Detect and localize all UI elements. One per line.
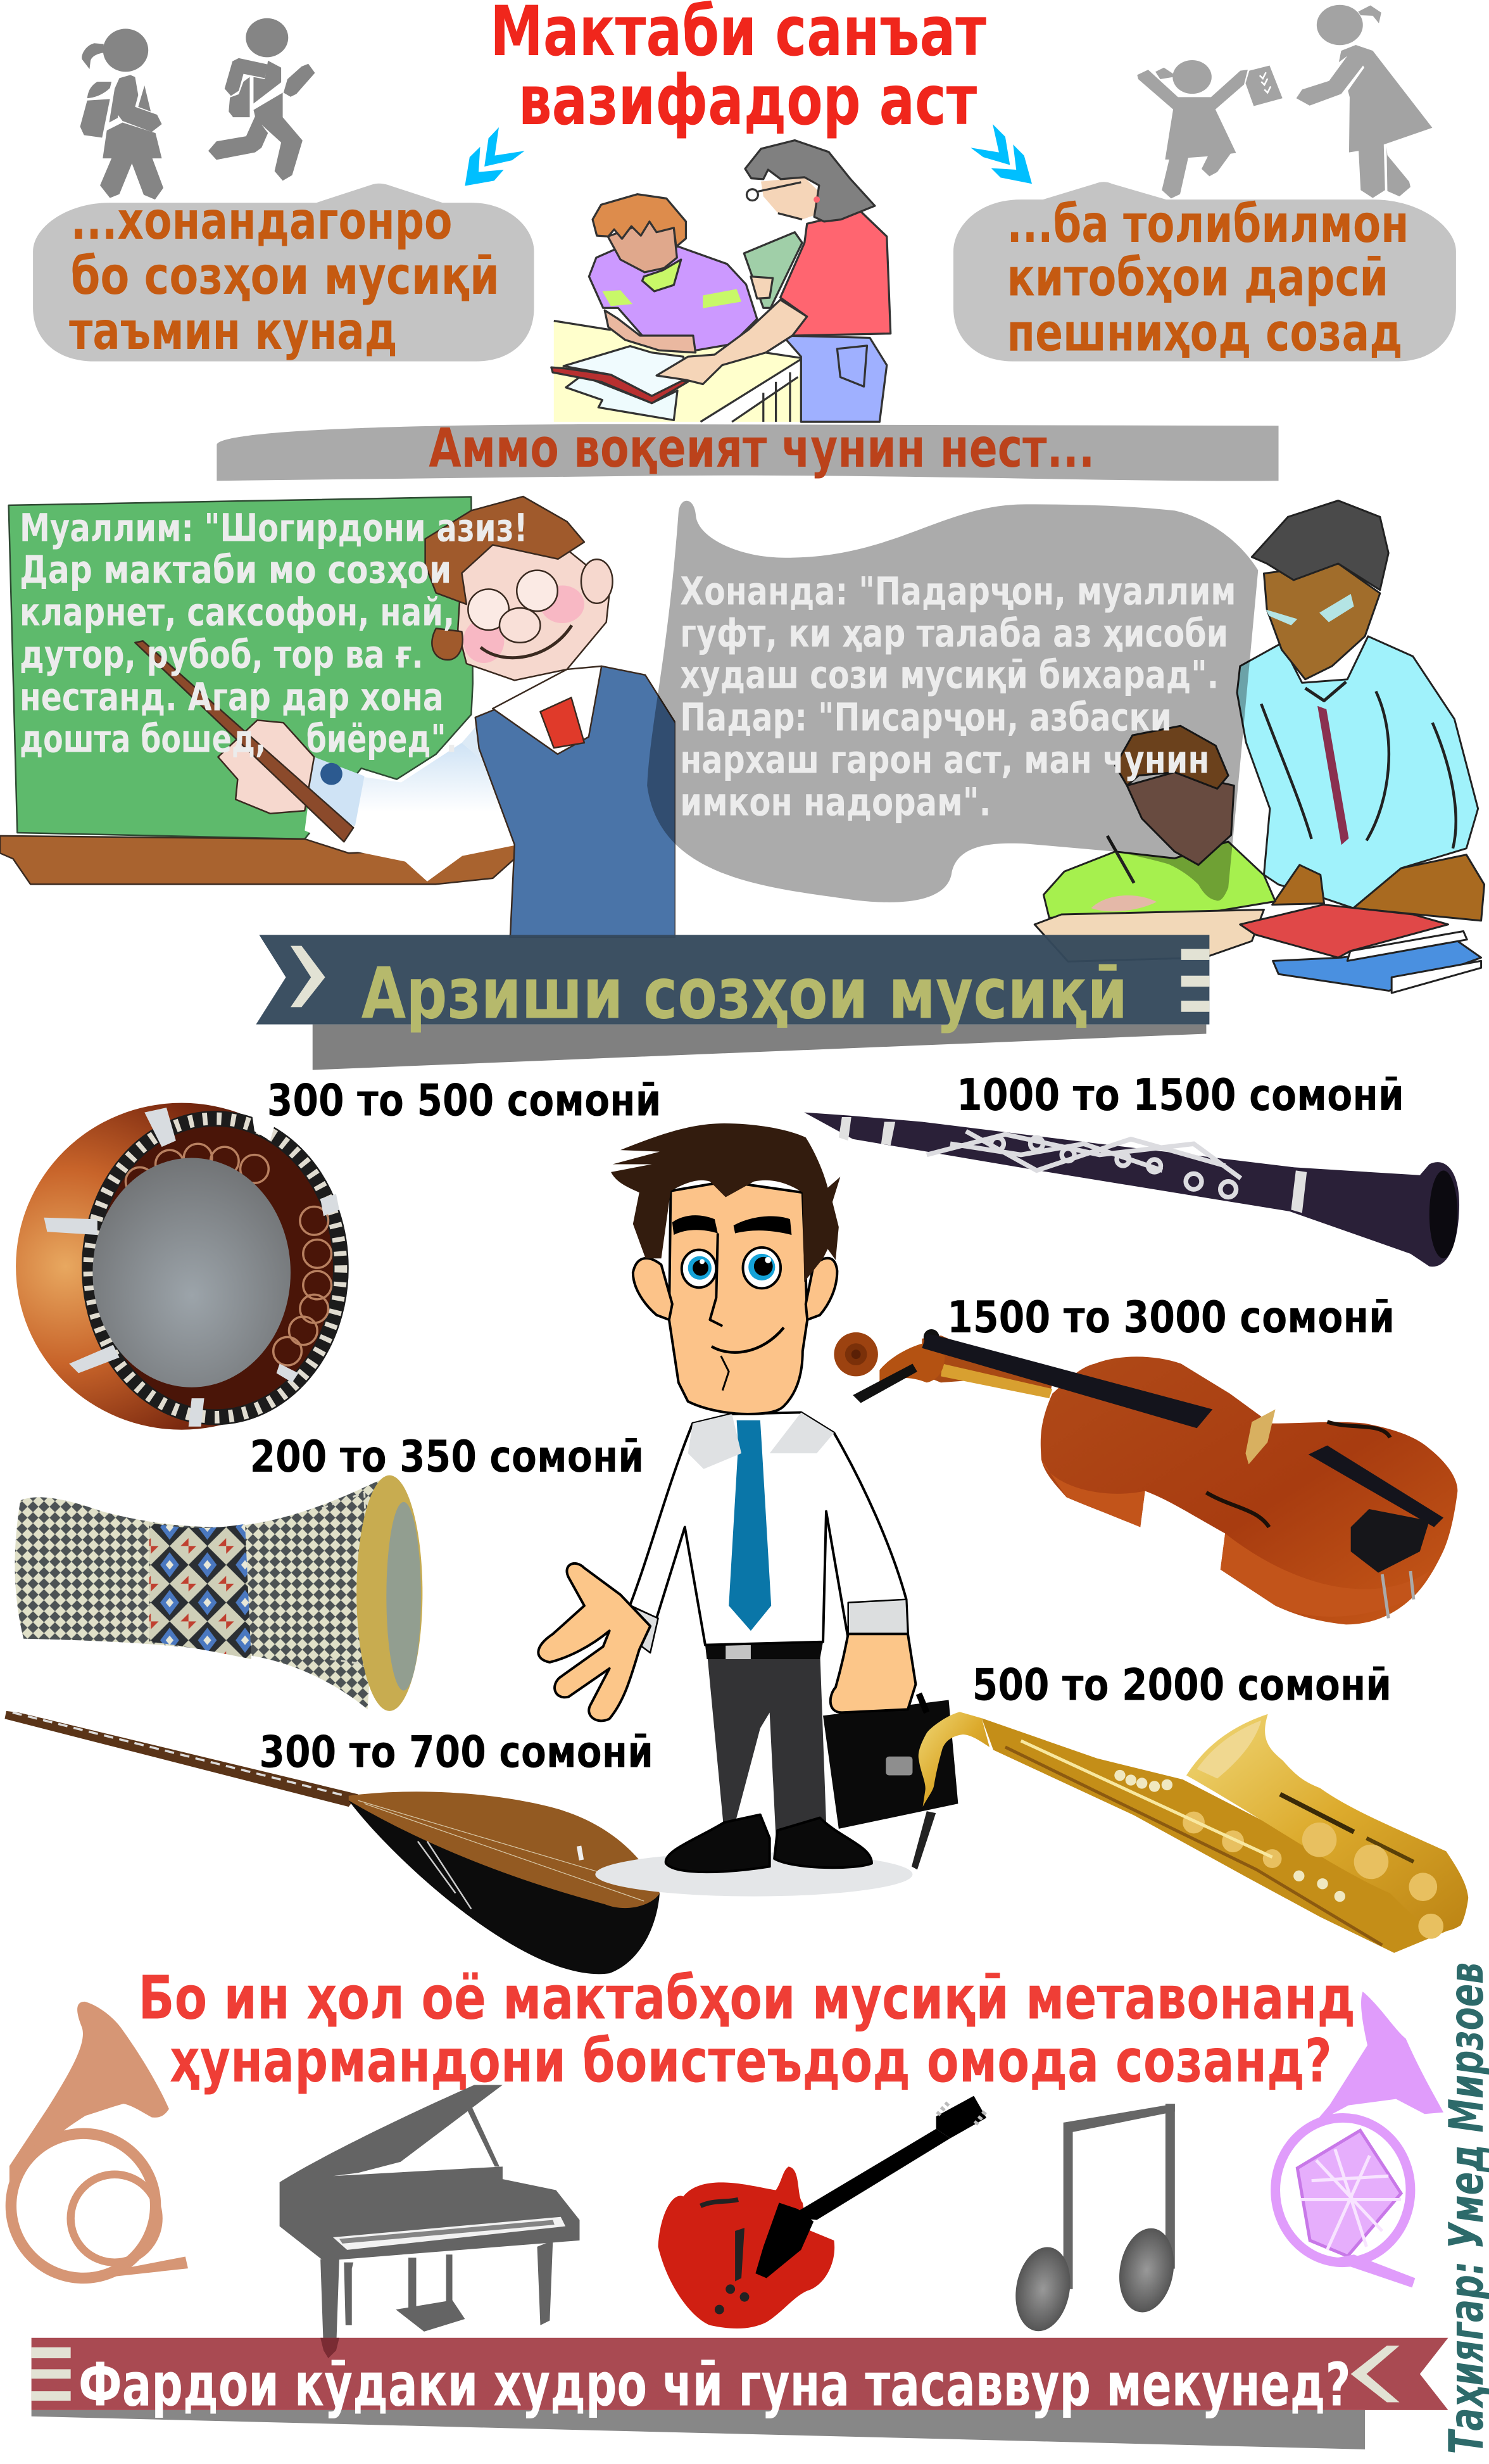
instrument: clarinet xyxy=(804,1113,1459,1267)
text: teacher speech: дутор, рубоб, тор ва ғ. xyxy=(20,633,424,677)
speech bubble: singers: ...хонандагонро xyxy=(71,191,453,251)
illustration: man presenting, holding briefcase xyxy=(538,1123,958,1897)
title: вазифадор аст xyxy=(518,60,977,141)
text: teacher speech: биёред". xyxy=(306,717,457,761)
speech bubble: textbooks xyxy=(953,182,1456,363)
icon: cheering child silhouette xyxy=(1137,60,1248,198)
icon: grand piano xyxy=(280,2085,579,2358)
price: saz: 300 то 700 сомонӣ xyxy=(259,1727,653,1778)
ribbon: value of instruments xyxy=(256,935,1209,1035)
text: teacher speech: нестанд. Агар дар хона xyxy=(20,675,444,719)
illustration: teacher with student writing xyxy=(1034,500,1485,993)
ribbon: value of instruments: Арзиши созҳои мусиқӣ xyxy=(361,953,1128,1035)
text: singer and father dialogue: гуфт, ки ҳар талаба аз ҳисоби xyxy=(680,612,1228,656)
instrument: doumbek drum xyxy=(15,1475,422,1711)
icon: schoolgirl with backpack silhouette xyxy=(80,28,163,199)
text: singer and father dialogue: нархаш гарон аст, ман чунин xyxy=(680,738,1209,783)
price: violin: 1500 то 3000 сомонӣ xyxy=(947,1292,1395,1343)
dialogue blob: singer and father xyxy=(647,501,1258,902)
icon: woman handing over paper silhouette xyxy=(1297,5,1432,198)
instrument: violin xyxy=(834,1329,1457,1624)
illustration: teacher helping student xyxy=(551,141,891,422)
question text xyxy=(138,1963,1355,2096)
text: teacher speech: Дар мактаби мо созҳои xyxy=(20,548,451,592)
icon: french horn left xyxy=(9,2002,188,2280)
speech bubble: singers: таъмин кунад xyxy=(69,301,398,362)
instrument: saz lute xyxy=(4,1711,660,1974)
ribbon shadow xyxy=(313,1025,1206,1070)
price: saxophone: 500 то 2000 сомонӣ xyxy=(972,1660,1392,1710)
price: daf: 300 то 500 сомонӣ xyxy=(267,1076,662,1127)
arrow: right cyan chevrons xyxy=(971,124,1032,184)
text: teacher speech xyxy=(20,507,528,761)
text: teacher speech: кларнет, саксофон, най, xyxy=(20,590,455,635)
text: singer and father dialogue: худаш сози мусиқӣ бихарад". xyxy=(680,654,1219,698)
speech bubble: singers: бо созҳои мусиқӣ xyxy=(71,246,499,306)
illustration: teacher at green chalkboard xyxy=(0,496,675,938)
arrow: left cyan chevrons xyxy=(465,127,525,186)
icon: french horn right xyxy=(1272,1992,1443,2287)
icon: electric guitar xyxy=(658,2096,986,2328)
instrument: saxophone xyxy=(912,1712,1468,1953)
icon: report card paper xyxy=(1245,65,1283,106)
text: singer and father dialogue: Падар: "Писарҷон, азбаски xyxy=(680,696,1172,740)
speech bubble: textbooks: китобҳои дарсӣ xyxy=(1007,248,1388,308)
text: singer and father dialogue xyxy=(680,569,1236,825)
text: teacher speech: Муаллим: "Шогирдони азиз! xyxy=(20,507,528,551)
price: clarinet: 1000 то 1500 сомонӣ xyxy=(957,1070,1404,1121)
text: singer and father dialogue: имкон надорам". xyxy=(680,781,991,825)
price: doumbek: 200 то 350 сомонӣ xyxy=(249,1432,644,1482)
instrument: daf frame drum xyxy=(16,1103,348,1430)
title xyxy=(490,0,986,141)
text: singer and father dialogue: Хонанда: "Падарҷон, муаллим xyxy=(680,569,1236,614)
text: teacher speech: дошта бошед, xyxy=(20,717,267,761)
icon: running schoolboy silhouette xyxy=(208,18,315,180)
speech bubble: singers xyxy=(33,184,534,362)
icon: music notes xyxy=(1009,2104,1180,2335)
banner: however: Аммо воқеият чунин нест... xyxy=(429,417,1095,479)
ribbon shadow bottom xyxy=(32,2410,1365,2449)
